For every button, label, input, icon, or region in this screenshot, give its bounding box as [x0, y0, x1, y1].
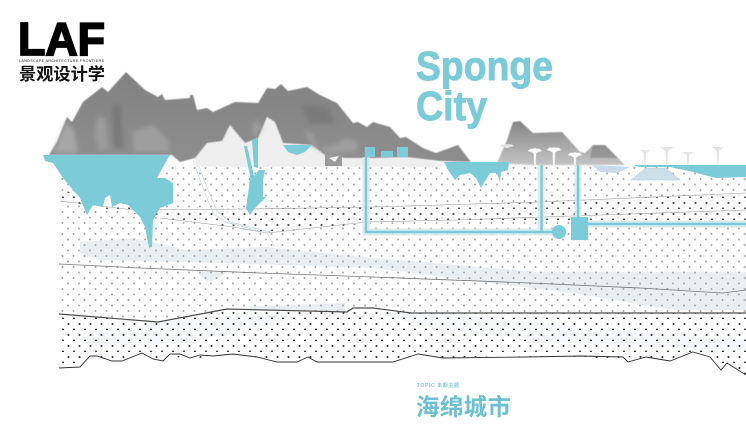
cross-section diagram [43, 72, 746, 375]
aquifer dots [60, 190, 746, 233]
buildings [366, 147, 408, 157]
wetland [592, 165, 630, 173]
small grey square [325, 155, 342, 166]
logo chinese name: 景观设计学 [19, 64, 105, 84]
small pond [283, 145, 312, 155]
groundwater bands [80, 238, 746, 350]
title line one: Sponge [416, 43, 553, 89]
storage tank [571, 217, 588, 240]
embankment [631, 168, 680, 180]
drainage pipes [366, 147, 746, 232]
pale ground hills [193, 117, 444, 167]
strata lines [59, 193, 746, 293]
logo subtitle: LANDSCAPE ARCHITECTURE FRONTIERS [19, 59, 105, 63]
pipe halo [366, 157, 746, 232]
pump circle [552, 225, 566, 239]
faded distant trees [500, 144, 724, 165]
bottom wavy ground line [59, 352, 746, 375]
mountains left range [49, 72, 471, 162]
logo [18, 13, 105, 84]
lower soil layer dots [59, 308, 746, 375]
river lines [193, 160, 275, 247]
topic label: TOPIC 本期主题 [417, 382, 459, 389]
aquifer band backing [60, 190, 746, 233]
trees [528, 147, 582, 165]
bedrock boundary line [59, 308, 746, 322]
upper soil layer dots [59, 167, 746, 322]
logo wordmark: LAF [18, 13, 105, 65]
river and shoreline [632, 165, 746, 178]
title [416, 43, 553, 129]
central pond [444, 162, 509, 188]
mountains right range [497, 121, 625, 165]
main lake [43, 155, 173, 248]
mountain shading [52, 104, 358, 154]
chinese topic title: 海绵城市 [416, 393, 511, 420]
narrow channel and reservoir [244, 138, 266, 215]
title line two: City [416, 83, 487, 129]
